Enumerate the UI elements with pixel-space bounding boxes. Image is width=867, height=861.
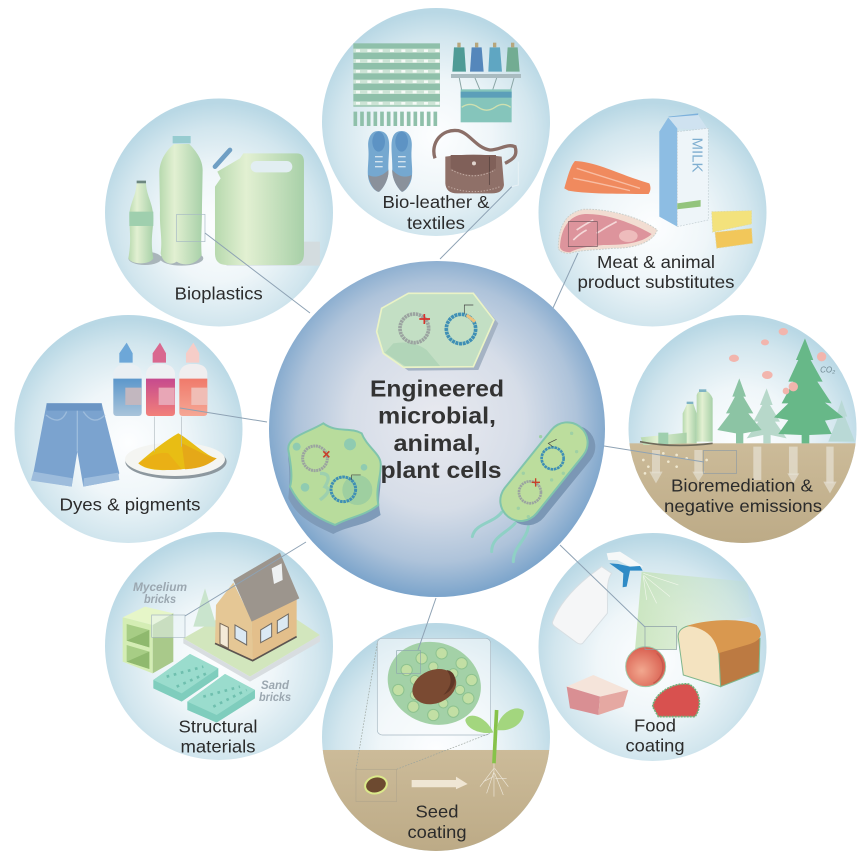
central sphere: [269, 261, 605, 597]
icon: spray bottle and coated foods: [552, 552, 761, 717]
panel: bioremediation and negative emissions: [627, 315, 860, 547]
title: Engineered: [370, 376, 504, 402]
icon: bacterium: [472, 432, 578, 562]
panel: dyes and pigments: [14, 315, 242, 543]
panel: structural materials: [105, 532, 333, 760]
label: Seed: [416, 802, 458, 822]
label: Bioremediation &: [671, 476, 813, 496]
icon: salmon, meat, milk, cheese: [558, 113, 753, 253]
panel: bio-leather and textiles: [322, 8, 550, 236]
label: Bioplastics: [175, 283, 263, 303]
scene: trees, bottles, soil: [627, 328, 860, 547]
label: coating: [408, 822, 466, 842]
label: product substitutes: [578, 272, 735, 292]
label: Food: [634, 716, 676, 736]
label: Bio-leather &: [382, 192, 490, 212]
panel: meat and animal product substitutes: [538, 98, 766, 326]
panel: bioplastics: [105, 98, 333, 326]
label: coating: [626, 736, 684, 756]
panel: seed coating: [320, 623, 553, 853]
title: microbial,: [378, 402, 496, 428]
panel: food coating: [538, 533, 766, 761]
icon: woven textile and bag: [353, 43, 521, 193]
bubble background: [538, 98, 766, 326]
bubble background: [322, 623, 550, 851]
bubble background: [628, 315, 856, 543]
cells: [288, 293, 578, 562]
panel: central engineered cells: [269, 261, 605, 597]
icon: plant cell: [377, 293, 498, 371]
annotation: sand bricks: bricks: [259, 692, 291, 704]
bubble background: [105, 98, 333, 326]
label: Structural: [178, 717, 258, 737]
title: animal,: [394, 430, 480, 456]
annotation: sand bricks: Sand: [261, 680, 290, 692]
label: textiles: [407, 213, 465, 233]
bubble background: [322, 8, 550, 236]
bubble background: [538, 533, 766, 761]
icon: animal cell: [288, 423, 381, 534]
label: materials: [180, 737, 256, 757]
bubble background: [14, 315, 242, 543]
connector lines: [180, 187, 704, 650]
label: negative emissions: [664, 496, 822, 516]
scene: seed and seedling: [320, 629, 553, 853]
annotation: mycelium bricks: bricks: [144, 594, 176, 606]
title: plant cells: [380, 457, 502, 483]
icon: salmon, meat, milk, cheese: MILK: [689, 137, 706, 172]
bubble background: [105, 532, 333, 760]
title: [370, 376, 504, 483]
scene: trees, bottles, soil: CO₂: [820, 365, 835, 374]
icon: house and bricks: [123, 553, 320, 723]
icon: plastic bottles and jug: [128, 136, 320, 266]
annotation: mycelium bricks: Mycelium: [133, 582, 187, 594]
label: Dyes & pigments: [60, 495, 201, 515]
icon: dye bottles, shorts, pigment: [31, 343, 227, 487]
label: Meat & animal: [597, 252, 715, 272]
